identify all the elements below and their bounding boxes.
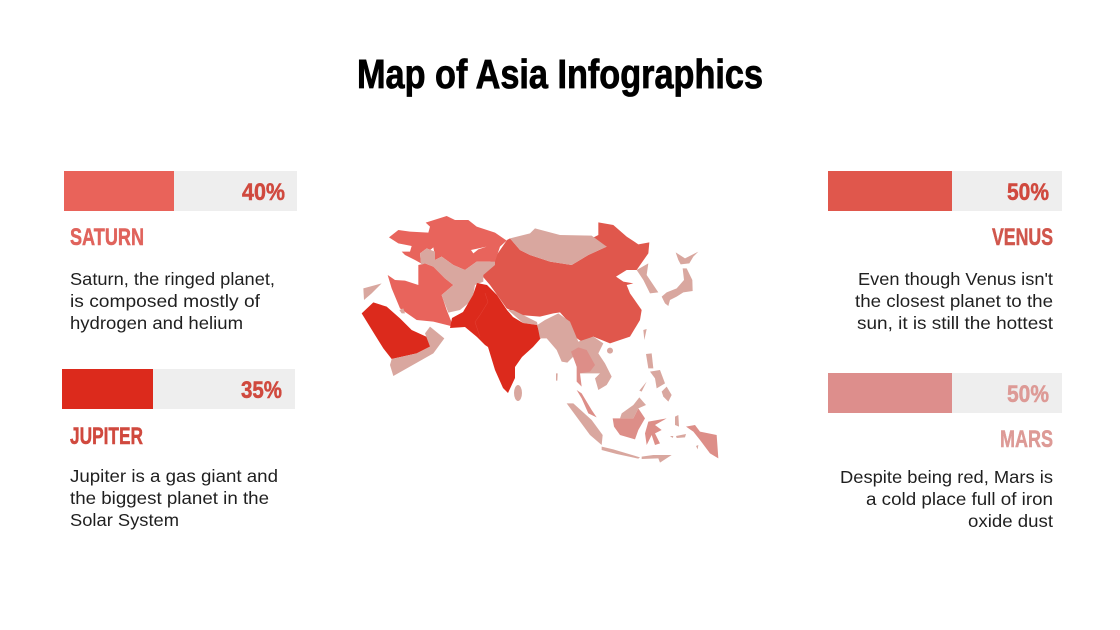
progress bar: Saturn 40% [64,171,297,211]
map of Asia [362,216,718,463]
value: 50%: 50% [1007,381,1049,408]
value: 50%: 50% [1007,179,1049,206]
text: Saturn description: Saturn, the ringed planet, [70,269,275,289]
heading: Jupiter: JUPITER [70,423,143,450]
text: Jupiter description: Jupiter is a gas giant and [70,466,278,486]
progress bar: Mars 50% [828,373,1062,413]
text: Jupiter description: Solar System [70,510,179,530]
text: Saturn description: is composed mostly of [70,291,260,311]
text: Mars description: Despite being red, Mars is [840,467,1053,487]
panel: Jupiter [62,369,295,530]
panel: Saturn [64,171,297,333]
value: 35%: 35% [241,377,282,404]
progress bar: Jupiter 35% [62,369,295,409]
text: Jupiter description [70,466,278,530]
text: Venus description [855,269,1053,333]
text: Saturn description [70,269,275,333]
text: Saturn description: hydrogen and helium [70,313,243,333]
progress bar: Venus 50% [828,171,1062,211]
text: Jupiter description: the biggest planet in the [70,488,269,508]
text: Venus description: the closest planet to the [855,291,1053,311]
text: Mars description: a cold place full of iron [866,489,1053,509]
text: Mars description: oxide dust [968,511,1053,531]
heading: Mars: MARS [1000,426,1053,453]
heading: Venus: VENUS [992,224,1053,251]
text: Venus description: sun, it is still the hottest [857,313,1053,333]
text: Mars description [840,467,1053,531]
value: 40%: 40% [242,179,285,206]
text: Venus description: Even though Venus isn't [858,269,1053,289]
panel: Venus [828,171,1062,333]
Nepal and Bangladesh band [508,310,540,338]
title: Map of Asia Infographics [357,51,763,97]
heading: Saturn: SATURN [70,224,144,251]
panel: Mars [828,373,1062,531]
